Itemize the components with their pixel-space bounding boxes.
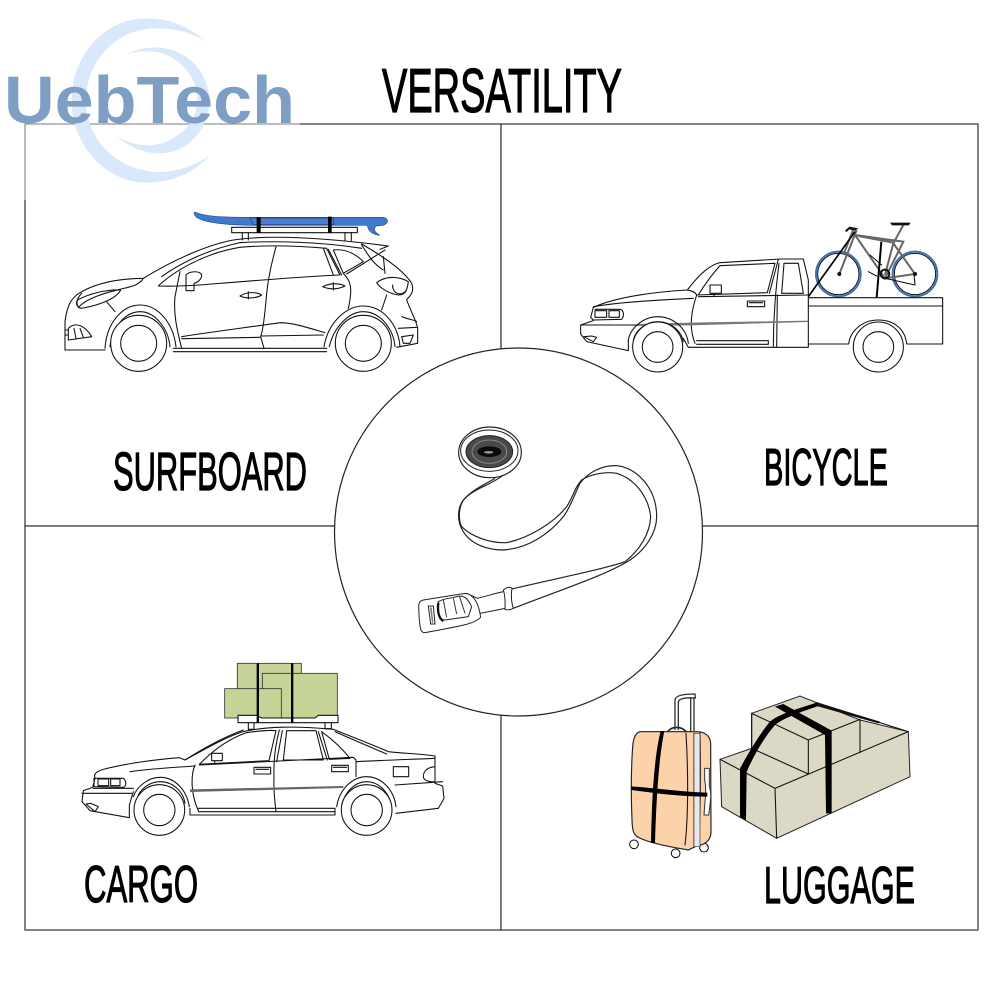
strap loop xyxy=(459,466,657,608)
watermark logo xyxy=(4,18,300,200)
straps xyxy=(257,217,332,233)
label: cargo: CARGO xyxy=(84,856,198,914)
frame fade under logo xyxy=(24,122,300,200)
logo rings xyxy=(72,18,211,183)
logo wordmark: UebTech xyxy=(4,63,295,138)
straps xyxy=(775,704,832,813)
icon: strap with buckle xyxy=(419,427,657,633)
car body xyxy=(82,727,444,835)
icon: sedan with cargo boxes xyxy=(82,663,444,835)
label: bicycle: BICYCLE xyxy=(764,439,888,497)
front wheel xyxy=(105,305,176,348)
keeper loop xyxy=(503,587,513,610)
truck body xyxy=(581,259,943,372)
car body xyxy=(65,237,418,371)
straps xyxy=(257,663,293,723)
straps xyxy=(631,731,707,843)
panel: bicycle xyxy=(501,124,978,526)
buckle plate xyxy=(419,593,481,633)
title: VERSATILITY xyxy=(382,57,622,126)
straps xyxy=(808,232,855,297)
roof rack xyxy=(232,227,357,233)
roof rack xyxy=(238,715,338,723)
panel: luggage xyxy=(501,526,978,930)
bicycle xyxy=(816,223,937,296)
icon: pickup truck with bicycle xyxy=(581,223,943,372)
rear wheel xyxy=(324,306,400,347)
icon: car with surfboard xyxy=(65,212,418,371)
icon: stacked boxes xyxy=(720,696,910,838)
surfboard xyxy=(194,212,387,235)
panel: surfboard xyxy=(25,124,501,526)
icon: suitcase xyxy=(630,694,711,858)
label: surfboard: SURFBOARD xyxy=(113,442,307,502)
panel: cargo xyxy=(25,526,501,930)
strap coil xyxy=(459,427,521,478)
center circle xyxy=(334,348,702,716)
cargo boxes xyxy=(225,663,337,718)
